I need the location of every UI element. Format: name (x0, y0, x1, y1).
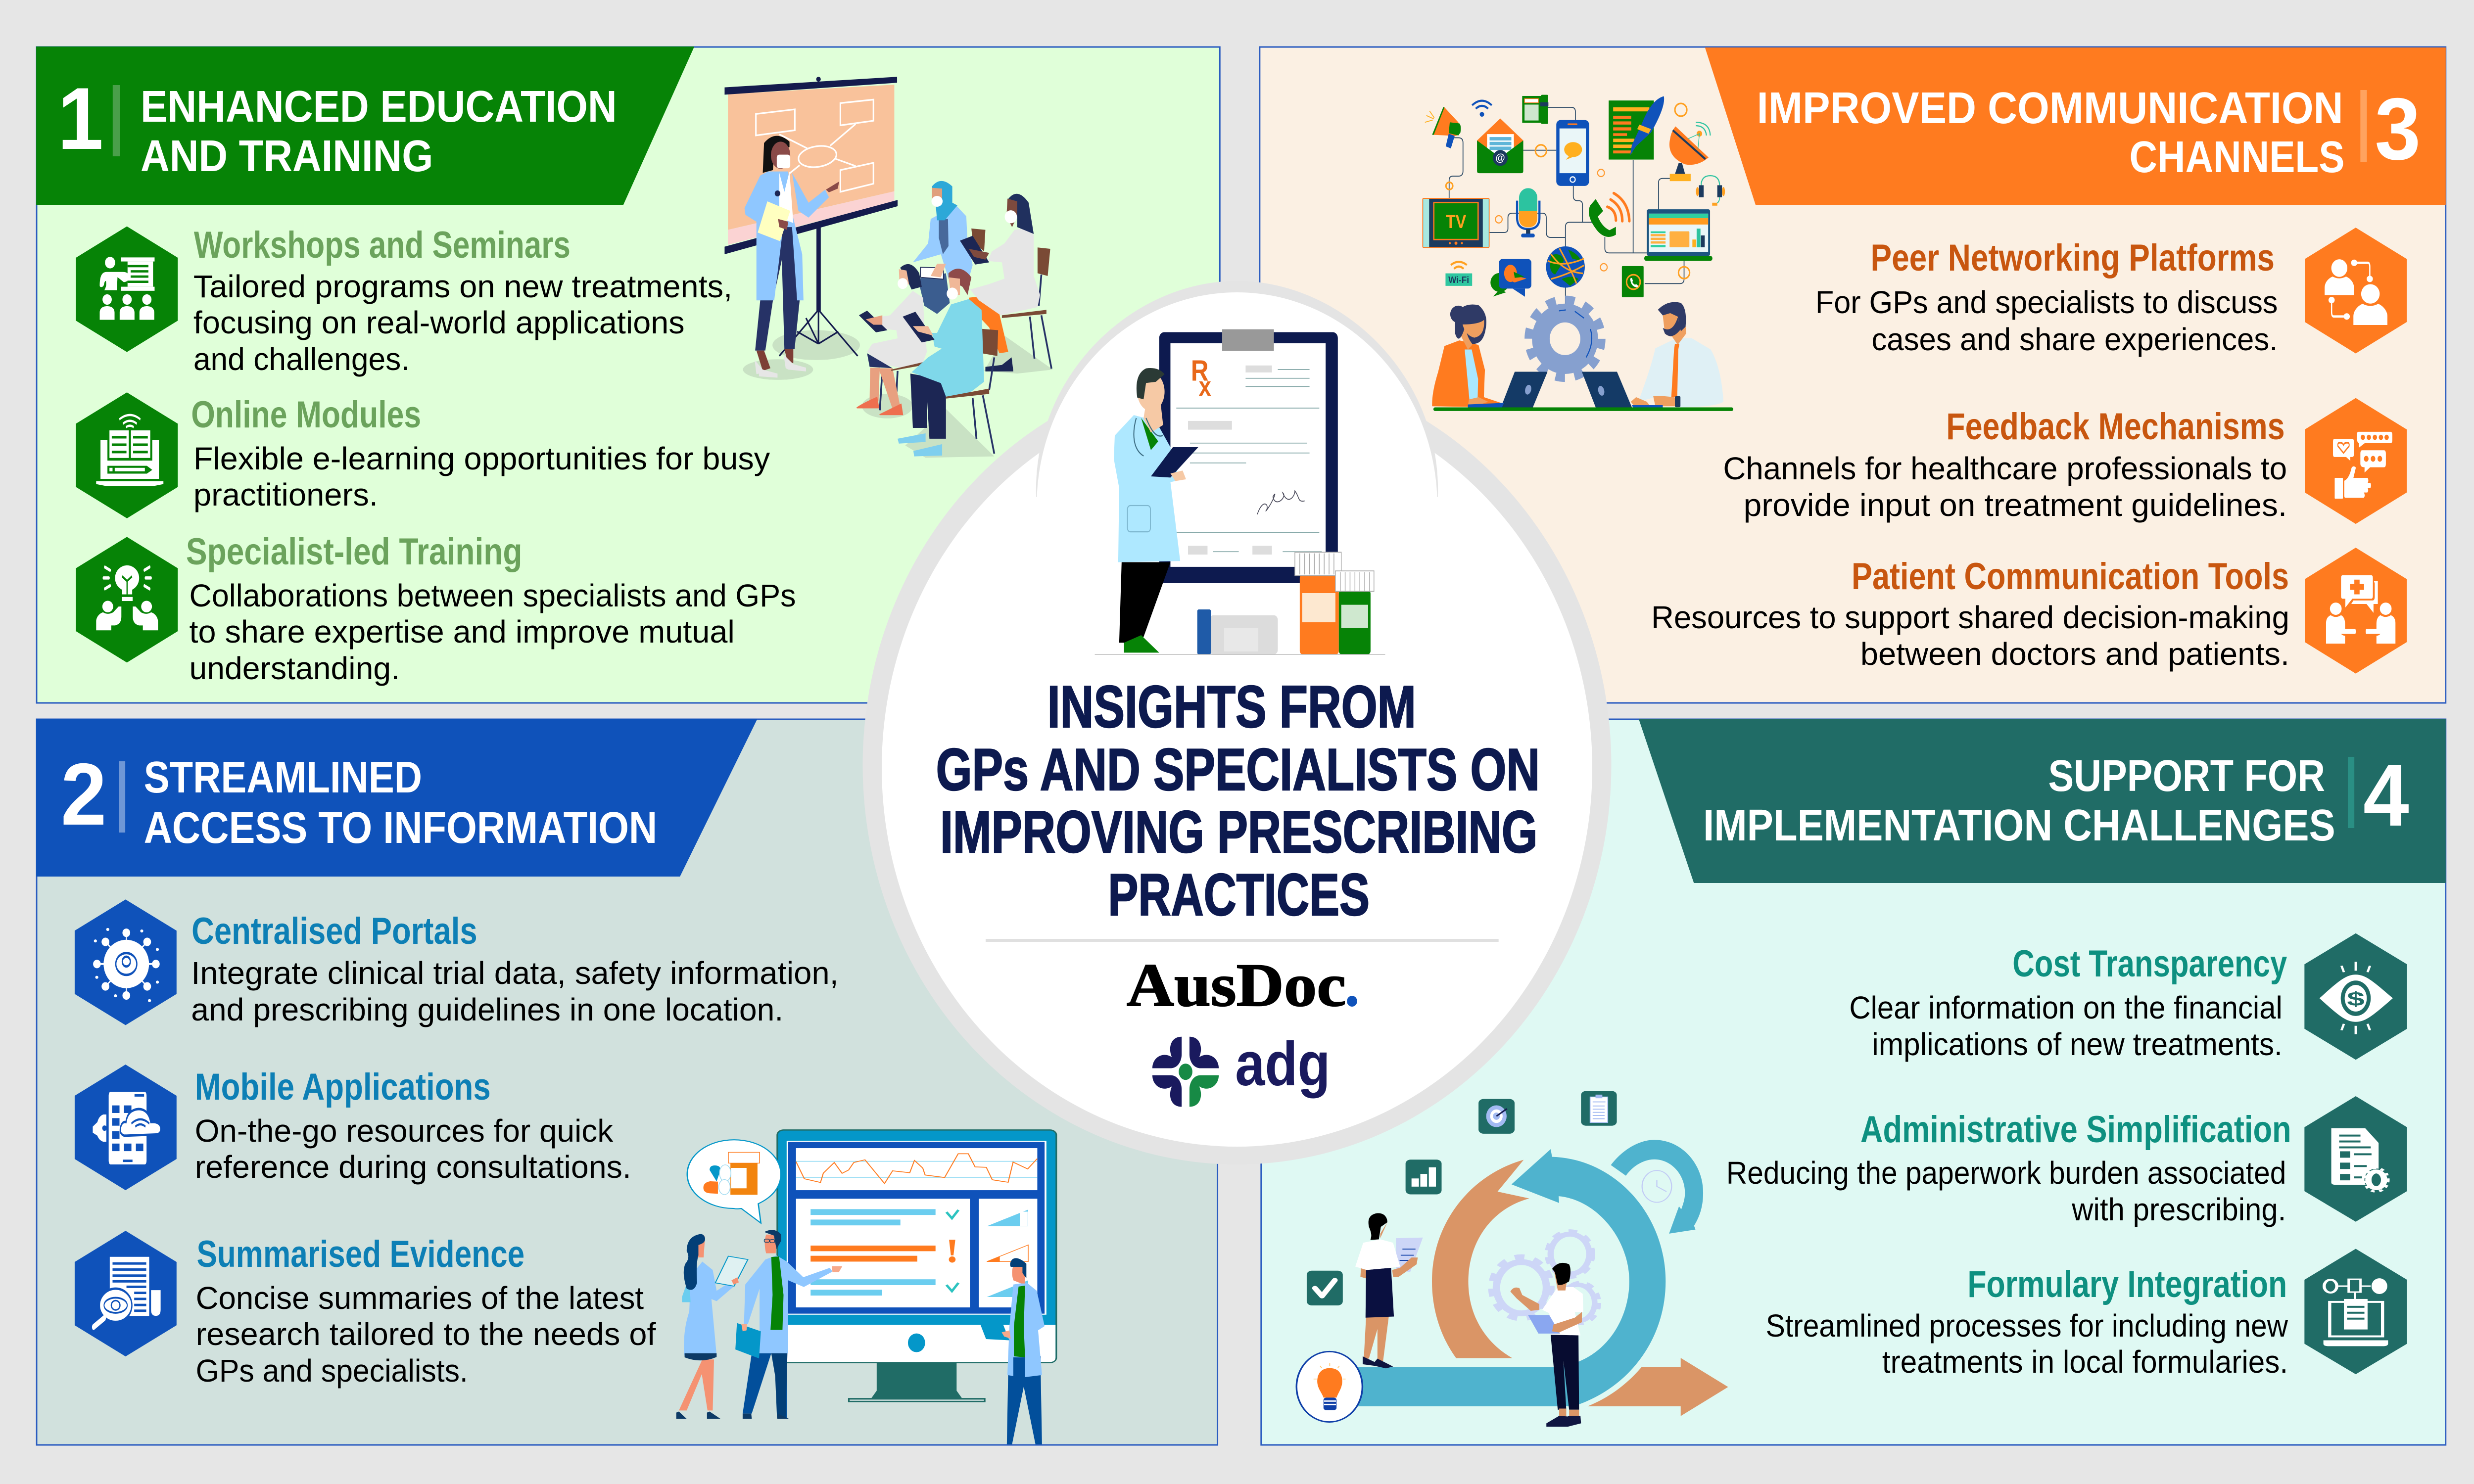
panel 1: enhanced education and training (36, 46, 1220, 703)
text: specialist-led body: understanding. (189, 651, 400, 686)
illustration: continuous improvement cycle (1296, 1091, 1728, 1427)
icon: formulary integration (2304, 1249, 2407, 1374)
heading: peer networking platforms: Peer Networking Platforms (1870, 236, 2275, 279)
main title: IMPROVING PRESCRIBING (940, 799, 1537, 865)
main title: INSIGHTS FROM (1047, 674, 1416, 740)
wifi symbol (1472, 101, 1492, 116)
icon: feedback mechanisms (2305, 398, 2407, 524)
seated: front-left woman (856, 264, 932, 415)
gears small (1446, 103, 1690, 278)
central gear (1529, 301, 1601, 377)
panel 4 header banner (1639, 719, 2446, 883)
text: centralised body: and prescribing guidelines in one location. (191, 992, 783, 1027)
icon: workshops (76, 227, 178, 352)
chat bird (1490, 259, 1531, 297)
panel 3 header banner (1705, 47, 2446, 205)
laptops and desk line (1433, 371, 1733, 411)
clinician: man pointing (735, 1230, 842, 1419)
text: formulary body: treatments in local formularies. (1882, 1345, 2288, 1380)
heading: formulary integration: Formulary Integration (1967, 1263, 2287, 1305)
text: specialist-led body (189, 578, 796, 686)
panel 4 header banner: IMPLEMENTATION CHALLENGES (1703, 801, 2335, 850)
text: patient communication body: Resources to support shared decision-making (1651, 600, 2289, 635)
heading: mobile applications: Mobile Applications (195, 1066, 491, 1108)
text: centralised body: Integrate clinical trial data, safety information, (191, 956, 839, 991)
icon: mobile applications (75, 1065, 177, 1190)
clinician: man with folder (978, 1258, 1045, 1444)
text: specialist-led body: to share expertise and improve mutual (189, 614, 735, 649)
icon: summarised evidence (75, 1231, 177, 1356)
TV: TV (1446, 211, 1467, 232)
panel 2 header banner: 2 (61, 745, 107, 843)
text: cost body: Clear information on the financial (1849, 990, 2283, 1025)
heading: centralised portals: Centralised Portals (191, 910, 477, 952)
wi-fi sign: Wi-Fi (1448, 275, 1469, 285)
text: cost body (1849, 990, 2283, 1062)
text: online modules body (193, 441, 770, 512)
text: centralised body (191, 956, 839, 1027)
clipboard: x (1199, 371, 1211, 402)
panel 1 header banner: AND TRAINING (141, 132, 433, 181)
illustration: presenter and seated audience (724, 77, 1053, 458)
panel 3 header banner: IMPROVED COMMUNICATION (1757, 84, 2343, 133)
text: administrative body: Reducing the paperwork burden associated (1726, 1156, 2286, 1191)
seated: front woman in teal coat (898, 269, 998, 457)
heading: administrative simplification: Administrative Simplification (1860, 1108, 2291, 1151)
icon: peer networking (2305, 228, 2407, 354)
icon: administrative simplification (2304, 1096, 2407, 1222)
tiles (1307, 1091, 1617, 1305)
panel 2: streamlined access to information (36, 719, 1218, 1445)
seated: hijab woman (913, 181, 973, 314)
panel 2 header banner: STREAMLINED (144, 753, 422, 802)
text: administrative body (1726, 1156, 2286, 1227)
heading: feedback mechanisms: Feedback Mechanisms (1946, 405, 2285, 448)
text: feedback body: provide input on treatment guidelines. (1744, 488, 2287, 523)
text: peer networking body: For GPs and specialists to discuss (1815, 285, 2278, 320)
panel 4 header banner: SUPPORT FOR (2048, 751, 2325, 801)
text: workshops body (193, 269, 732, 377)
logo: adg: adg (1235, 1029, 1330, 1099)
panel 4: support for implementation challenges (1261, 719, 2446, 1445)
megaphone (1425, 107, 1461, 148)
panel 2 header banner (36, 719, 758, 877)
text: workshops body: focusing on real-world applications (193, 305, 685, 340)
heading: summarised evidence: Summarised Evidence (196, 1233, 524, 1275)
lightbulb badge (1296, 1351, 1362, 1422)
illustration: monitor with three clinicians (676, 1130, 1056, 1444)
speech bubble with medication (687, 1140, 781, 1223)
text: summarised body (196, 1281, 656, 1389)
text: peer networking body (1815, 285, 2278, 357)
text: patient communication body: between doctors and patients. (1860, 637, 2289, 672)
cycle arrows (1358, 1140, 1728, 1416)
headset (1696, 176, 1725, 206)
text: workshops body: and challenges. (193, 342, 410, 377)
seated: woman in white coat at right (960, 194, 1051, 371)
panel 1 header banner: 1 (57, 69, 103, 168)
clinician: woman with tablet (676, 1234, 748, 1419)
fallen bottle (1197, 609, 1278, 654)
panel 1 header banner: ENHANCED EDUCATION (141, 82, 617, 132)
logo: adg (1152, 1029, 1330, 1107)
panel 2 header banner: ACCESS TO INFORMATION (144, 803, 657, 853)
text: online modules body: practitioners. (193, 477, 378, 512)
satellite dish (1669, 122, 1710, 181)
text: cost body: implications of new treatments. (1872, 1027, 2283, 1062)
main title: PRACTICES (1108, 862, 1370, 928)
text: summarised body: GPs and specialists. (196, 1353, 468, 1389)
globe (1546, 246, 1585, 288)
text: formulary body: Streamlined processes for including new (1766, 1308, 2288, 1344)
panel 3 header banner: CHANNELS (2130, 133, 2344, 182)
heading: specialist-led training: Specialist-led Training (186, 530, 522, 573)
envelope (1477, 118, 1523, 173)
icon: centralised portals (75, 899, 177, 1025)
woman at laptop (1432, 305, 1501, 408)
microphone (1517, 188, 1539, 237)
text: summarised body: research tailored to the needs of (196, 1317, 656, 1352)
monitor (777, 1130, 1056, 1402)
wi-fi sign (1445, 262, 1472, 286)
text: online modules body: Flexible e-learning opportunities for busy (193, 441, 770, 476)
illustration: doctor with prescription (1095, 329, 1385, 654)
man at laptop (1631, 302, 1723, 408)
address book (1622, 266, 1644, 297)
laptop (1644, 209, 1713, 261)
text: feedback body (1723, 451, 2287, 523)
central circle backdrop (863, 281, 1611, 1164)
icon: online modules (76, 392, 178, 518)
telephone handset with signal (1589, 193, 1629, 237)
clipboard (1159, 329, 1338, 583)
panel 4 header banner: 4 (2363, 746, 2409, 844)
heading: cost transparency: Cost Transparency (2012, 942, 2287, 985)
pill bottles (1295, 552, 1374, 654)
desk phone (1522, 95, 1548, 124)
presenter (745, 136, 839, 378)
person: man with tablet (1510, 1263, 1583, 1427)
text: mobile body: reference during consultations. (195, 1150, 631, 1185)
panel 3: improved communication channels (1260, 47, 2446, 703)
heading: online modules: Online Modules (191, 393, 421, 436)
text: patient communication body (1651, 600, 2289, 672)
text: feedback body: Channels for healthcare professionals to (1723, 451, 2287, 486)
panel 3 header banner: 3 (2375, 80, 2421, 178)
smartphone (1556, 120, 1589, 186)
heading: patient communication tools: Patient Communication Tools (1852, 555, 2289, 598)
text: mobile body: On-the-go resources for quick (195, 1113, 614, 1149)
document and pen (1609, 96, 1664, 160)
envelope: @ (1495, 152, 1505, 164)
icon: cost transparency (2304, 933, 2407, 1060)
clipboard: R (1191, 354, 1209, 387)
tile icons (1315, 1095, 1608, 1296)
doctor (1114, 368, 1198, 652)
main title (936, 674, 1540, 928)
icon: cost transparency: $ (2347, 988, 2365, 1010)
heading: workshops and seminars: Workshops and Seminars (194, 224, 571, 266)
person: woman with paper (1355, 1213, 1423, 1368)
text: administrative body: with prescribing. (2071, 1192, 2286, 1227)
text: summarised body: Concise summaries of the latest (196, 1281, 644, 1316)
logo: AusDoc: AusDoc (1127, 951, 1346, 1019)
illustration: communication network (1423, 95, 1733, 411)
text: formulary body (1766, 1308, 2288, 1380)
text: specialist-led body: Collaborations between specialists and GPs (189, 578, 796, 613)
text: mobile body (195, 1113, 631, 1185)
panel 1 header banner (36, 46, 694, 205)
text: workshops body: Tailored programs on new treatments, (193, 269, 732, 304)
icon: specialist-led training (76, 537, 178, 662)
text: peer networking body: cases and share experiences. (1871, 322, 2278, 357)
icon: patient communication tools (2305, 548, 2407, 674)
main title: GPs AND SPECIALISTS ON (936, 737, 1540, 803)
gears (1492, 1231, 1599, 1323)
TV (1423, 198, 1490, 248)
